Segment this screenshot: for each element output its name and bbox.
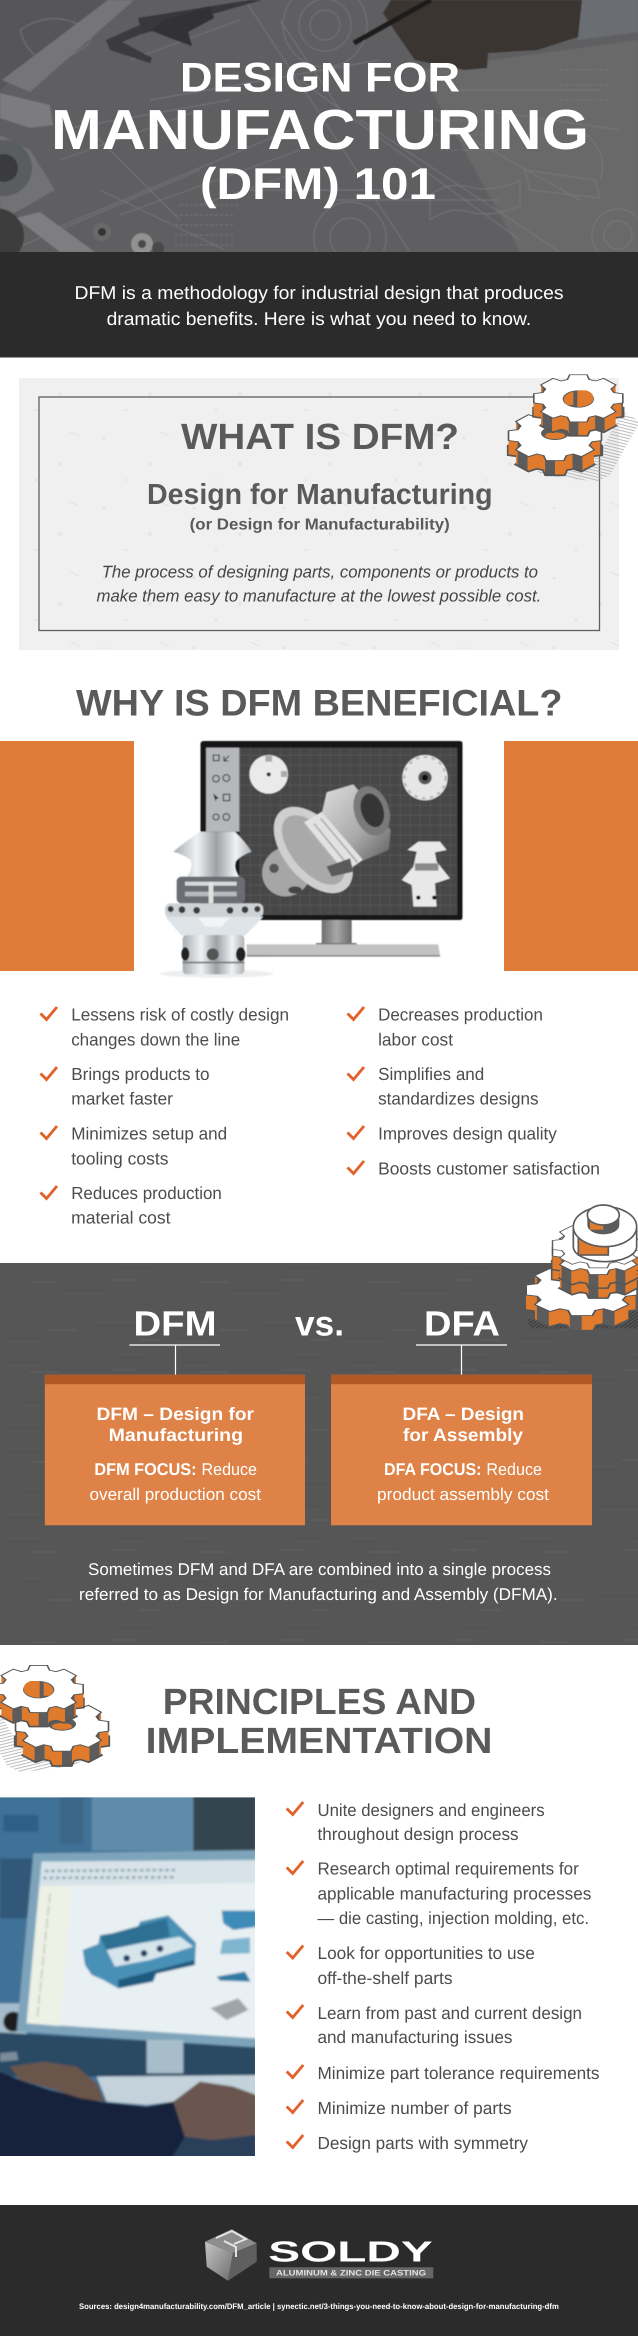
heading: principles and implementation — [146, 1681, 492, 1761]
item: brings products: Brings products to — [71, 1064, 210, 1084]
monitor stand — [247, 920, 440, 957]
card: DFA: DFA FOCUS: — [384, 1460, 482, 1479]
item: simplifies: standardizes designs — [378, 1088, 539, 1108]
card: DFA: DFA – Design — [402, 1404, 524, 1424]
item: simplifies — [348, 1064, 539, 1108]
title: DESIGN FOR — [180, 54, 460, 101]
item: lessens risk: Lessens risk of costly design — [71, 1004, 289, 1024]
subheading note: (or Design for Manufacturability) — [190, 516, 450, 534]
card: DFM: Manufacturing — [109, 1425, 243, 1445]
card: DFA: for Assembly — [403, 1425, 523, 1445]
item: tolerance: Minimize part tolerance requirements — [318, 2063, 600, 2083]
monitor screen — [201, 741, 463, 920]
item: decreases labor: Decreases production — [378, 1004, 543, 1024]
card: DFA: product assembly cost — [377, 1485, 549, 1504]
icon: gears — [509, 375, 638, 482]
heading: principles and implementation: PRINCIPLES AND — [163, 1681, 476, 1722]
intro band: dramatic benefits. Here is what you need to know. — [107, 308, 531, 329]
definition text: The process of designing parts, components or products to — [102, 562, 538, 581]
connector: DFM — [129, 1345, 220, 1375]
item: learn — [287, 2003, 582, 2047]
heading: why is DFM beneficial: WHY IS DFM BENEFICIAL? — [76, 682, 562, 724]
heading: DFM: DFM — [134, 1305, 216, 1344]
card: DFA: Reduce — [486, 1460, 542, 1479]
intro band — [0, 252, 638, 358]
title: (DFM) 101 — [200, 160, 436, 209]
item: learn: Learn from past and current design — [318, 2003, 582, 2023]
item: minimizes setup — [40, 1124, 227, 1168]
monitor — [17, 1850, 270, 2048]
item: minimizes setup: tooling costs — [71, 1148, 169, 1168]
item: look: Look for opportunities to use — [318, 1943, 535, 1963]
item: improves quality: Improves design quality — [378, 1124, 557, 1144]
note: DFMA: referred to as Design for Manufacturing and Assembly (DFMA). — [79, 1585, 558, 1604]
item: look: off-the-shelf parts — [318, 1968, 453, 1988]
card: DFA — [331, 1375, 592, 1525]
checklist: benefits right column — [348, 1004, 600, 1178]
checklist: benefits left column — [40, 1004, 289, 1227]
definition text — [96, 562, 541, 605]
checklist: principles — [287, 1800, 600, 2153]
wordmark: SOLDY — [268, 2237, 433, 2269]
title — [51, 54, 589, 209]
title: MANUFACTURING — [51, 98, 589, 161]
item: lessens risk: changes down the line — [71, 1029, 240, 1049]
icon: stacked gear and cylinder — [526, 1205, 638, 1331]
arm and hands — [0, 2072, 186, 2156]
item: simplifies: Simplifies and — [378, 1064, 484, 1084]
panel: what is DFM — [19, 378, 619, 650]
item: research: — die casting, injection molding, etc. — [318, 1908, 589, 1928]
icon: Soldy logo cube — [205, 2229, 257, 2281]
item: unite: throughout design process — [318, 1824, 519, 1844]
tagline — [269, 2267, 433, 2278]
icon: gears left — [0, 1665, 108, 1772]
foreground metal part — [160, 832, 273, 978]
card: DFM: Reduce — [202, 1460, 257, 1479]
note: DFMA: Sometimes DFM and DFA are combined into a single process — [88, 1560, 551, 1579]
card: DFM — [45, 1375, 305, 1525]
screen parts — [249, 755, 450, 907]
photo: engineer at CAD workstation — [0, 1790, 270, 2167]
footer — [0, 2205, 638, 2336]
item: lessens risk — [40, 1004, 289, 1049]
item: research: Research optimal requirements for — [318, 1859, 579, 1879]
item: minimizes setup: Minimizes setup and — [71, 1124, 227, 1144]
tagline: ALUMINUM & ZINC DIE CASTING — [276, 2269, 426, 2278]
heading: DFA: DFA — [424, 1305, 500, 1344]
heading: principles and implementation: IMPLEMENTATION — [146, 1720, 492, 1761]
item: reduces material: material cost — [71, 1207, 171, 1227]
desk and stand — [0, 2032, 270, 2077]
heading: vs: vs. — [295, 1305, 344, 1344]
item: brings products — [40, 1064, 210, 1108]
connector: DFA — [416, 1345, 507, 1375]
item: decreases labor: labor cost — [378, 1029, 453, 1049]
heading: what is DFM: WHAT IS DFM? — [181, 416, 459, 457]
card: DFM: overall production cost — [90, 1485, 261, 1504]
orange block right — [504, 741, 638, 971]
item: research — [287, 1859, 592, 1928]
panel: DFM vs DFA — [0, 1263, 638, 1645]
item: boosts satisfaction: Boosts customer satisfaction — [378, 1158, 600, 1178]
sources: Sources: design4manufacturability.com/DFM_article | synectic.net/3-things-you-need-to-know-about-design-for-manufacturing-dfm — [79, 2302, 559, 2311]
CAD part — [83, 1915, 196, 1988]
item: symmetry: Design parts with symmetry — [318, 2133, 528, 2153]
central 3D part — [252, 782, 396, 908]
intro band: DFM is a methodology for industrial design that produces — [74, 282, 564, 303]
header photo: blueprint background — [0, 0, 638, 274]
item: decreases labor — [348, 1004, 543, 1049]
item: unite: Unite designers and engineers — [318, 1800, 545, 1820]
card: DFM: DFM FOCUS: — [94, 1460, 197, 1479]
illustration: CAD monitor with metal part — [160, 741, 463, 978]
orange block left — [0, 741, 134, 971]
item: reduces material: Reduces production — [71, 1183, 222, 1203]
item: research: applicable manufacturing processes — [318, 1884, 592, 1904]
item: number of parts: Minimize number of parts — [318, 2098, 512, 2118]
note: DFMA — [79, 1560, 558, 1604]
item: unite — [287, 1800, 545, 1844]
item: look — [287, 1943, 535, 1988]
item: brings products: market faster — [71, 1088, 173, 1108]
card: DFM: DFM – Design for — [96, 1404, 254, 1424]
item: reduces material — [40, 1183, 222, 1227]
definition text: make them easy to manufacture at the lowest possible cost. — [96, 586, 541, 605]
subheading: Design for Manufacturing — [147, 479, 492, 511]
item: learn: and manufacturing issues — [318, 2027, 513, 2047]
